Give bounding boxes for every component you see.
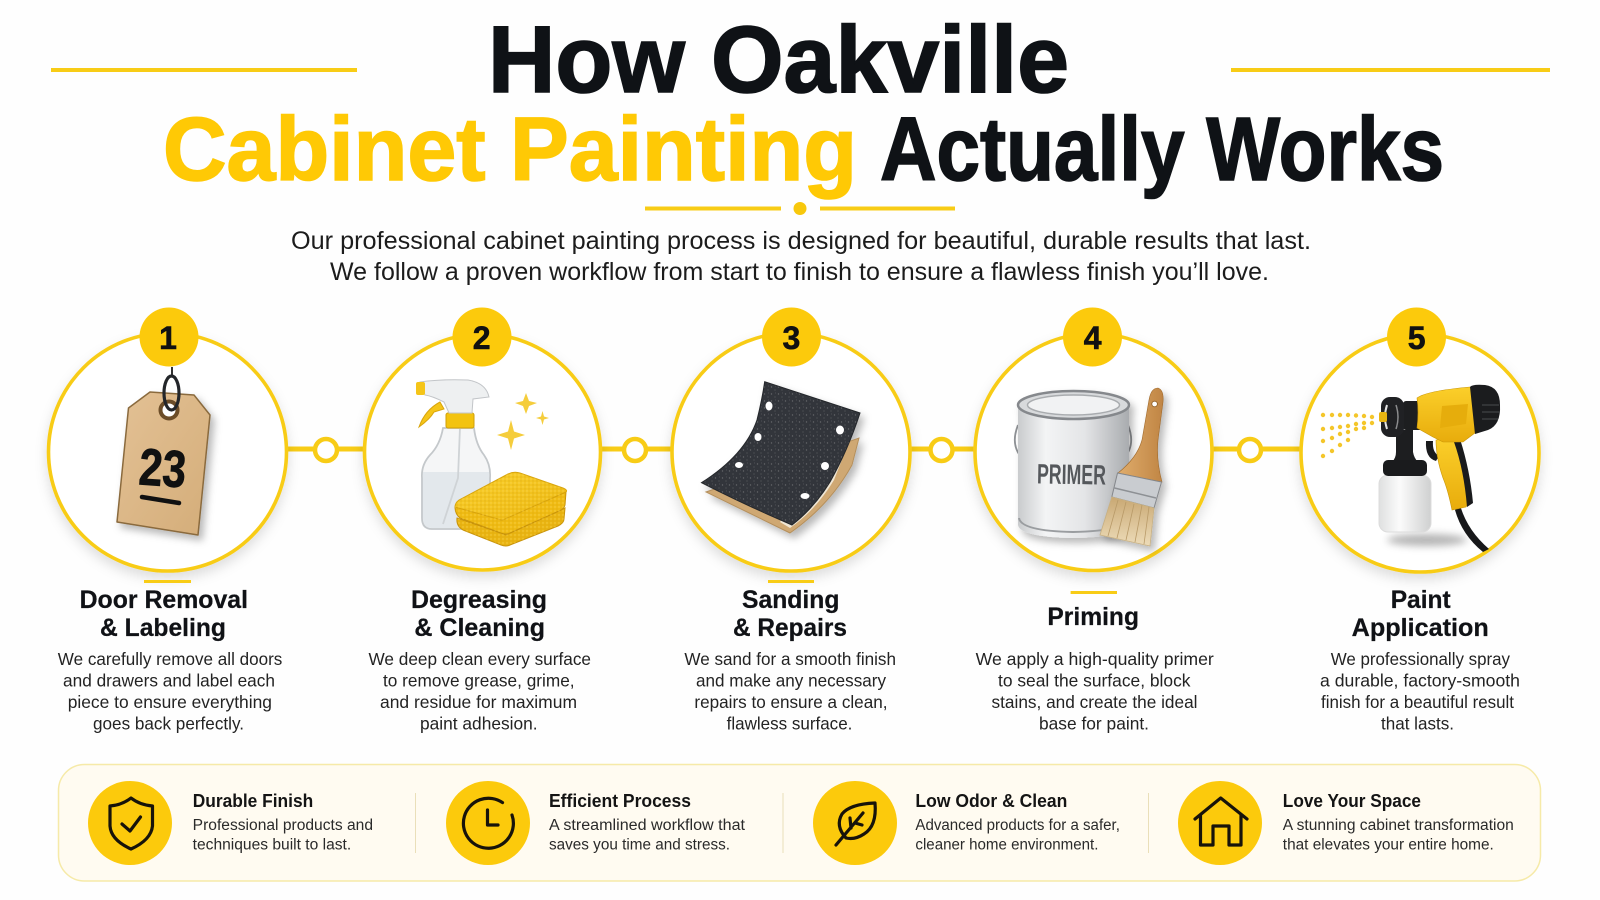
- step 2 description: [368, 649, 591, 734]
- step 1 description: [58, 649, 283, 734]
- step 1 description: goes back perfectly.: [93, 714, 244, 734]
- low odor text: Low Odor & Clean: [915, 791, 1067, 811]
- step 5 ring: [1301, 334, 1539, 572]
- icon: sandpaper sheets: [702, 382, 860, 533]
- benefit: efficient process: [446, 781, 746, 865]
- icon: leaf: [813, 781, 897, 865]
- step 3 number badge: [762, 308, 821, 366]
- step 5 number badge: [1387, 308, 1446, 366]
- step 4 description: [976, 649, 1214, 734]
- step 2 ring: [364, 334, 600, 570]
- step 2 number badge: 2: [473, 320, 490, 356]
- step 4: priming: [975, 308, 1214, 734]
- step 3 description: and make any necessary: [696, 670, 886, 690]
- step 5 heading: Application: [1352, 614, 1489, 642]
- step 2 description: paint adhesion.: [420, 714, 538, 734]
- step 1 number badge: [140, 308, 198, 366]
- step 5: paint application: [1301, 308, 1539, 734]
- title line 2 highlight: Cabinet Painting: [163, 100, 857, 200]
- low odor text: Advanced products for a safer,: [915, 817, 1120, 834]
- spray dots: [1321, 413, 1374, 458]
- step 5 description: [1320, 649, 1520, 734]
- step 3 description: [684, 649, 896, 734]
- step 2 heading: [411, 586, 547, 642]
- step 2: degreasing and cleaning: [364, 308, 600, 734]
- intro paragraph: Our professional cabinet painting process is designed for beautiful, durable results that last.: [291, 227, 1311, 255]
- icon: house: [1178, 781, 1262, 865]
- icon: numbered door tag: [117, 367, 210, 535]
- step 3 ring: [672, 333, 910, 571]
- step 4 description: We apply a high-quality primer: [976, 649, 1214, 669]
- step 2 description: and residue for maximum: [380, 692, 577, 712]
- step 5 heading: [1352, 586, 1489, 642]
- step 5 description: finish for a beautiful result: [1321, 692, 1514, 712]
- efficient process text: [549, 791, 746, 854]
- step 5 description: We professionally spray: [1331, 649, 1510, 669]
- love your space text: that elevates your entire home.: [1283, 836, 1494, 854]
- step 3 description: flawless surface.: [727, 714, 852, 734]
- step 1 heading: & Labeling: [100, 614, 226, 642]
- step 3 heading: Sanding: [742, 586, 839, 614]
- step 4 description: stains, and create the ideal: [992, 692, 1198, 712]
- love your space text: Love Your Space: [1283, 791, 1421, 811]
- step 1 ring: [48, 333, 286, 571]
- step 5 description: a durable, factory-smooth: [1320, 670, 1520, 690]
- durable finish text: Professional products and: [193, 817, 373, 834]
- title line 1: How Oakville: [488, 7, 1069, 113]
- panel background: [58, 764, 1540, 881]
- step 3 accent rule: [768, 580, 814, 583]
- step 3 description: repairs to ensure a clean,: [694, 692, 888, 712]
- icon: shield with check: [88, 781, 172, 865]
- step 1 accent rule: [144, 580, 191, 583]
- step 1: door removal and labeling: [48, 308, 286, 734]
- step 4 heading: Priming: [1047, 603, 1139, 631]
- step 2 description: We deep clean every surface: [368, 649, 591, 669]
- step 2 description: to remove grease, grime,: [383, 670, 575, 690]
- efficient process text: A streamlined workflow that: [549, 817, 746, 834]
- icon: primer can and brush: [1015, 388, 1163, 546]
- icon: primer can and brush: PRIMER: [1037, 458, 1106, 491]
- efficient process text: saves you time and stress.: [549, 836, 730, 854]
- title line 2 remainder: Actually Works: [880, 100, 1444, 200]
- benefit: love your space: [1178, 781, 1514, 865]
- step 1 description: We carefully remove all doors: [58, 649, 283, 669]
- low odor text: cleaner home environment.: [915, 836, 1098, 854]
- step 4 number badge: 4: [1084, 320, 1102, 356]
- durable finish text: Durable Finish: [193, 791, 313, 811]
- title ornament: [645, 202, 955, 215]
- step 4 description: to seal the surface, block: [998, 670, 1191, 690]
- icon: clock: [446, 781, 530, 865]
- love your space text: A stunning cabinet transformation: [1283, 817, 1514, 834]
- durable finish text: techniques built to last.: [193, 836, 351, 854]
- intro paragraph: [291, 227, 1311, 286]
- process connectors: [287, 439, 1301, 461]
- benefit: durable finish: [88, 781, 373, 865]
- step 4 number badge: [1063, 308, 1122, 366]
- step 5 heading: Paint: [1391, 586, 1451, 614]
- benefit: low odor and clean: [813, 781, 1120, 865]
- step 1 description: and drawers and label each: [63, 670, 275, 690]
- step 1 number badge: 1: [159, 320, 177, 356]
- step 3 heading: [733, 586, 847, 642]
- efficient process text: Efficient Process: [549, 791, 691, 811]
- left title rule: [51, 68, 357, 72]
- icon: numbered door tag: 23: [137, 438, 188, 500]
- panel: benefits strip: [58, 764, 1540, 881]
- step 5 description: that lasts.: [1381, 714, 1454, 734]
- step 4 ring: [975, 334, 1212, 570]
- step 1 description: piece to ensure everything: [68, 692, 272, 712]
- step 5 number badge: 5: [1408, 320, 1425, 356]
- step 1 heading: [80, 586, 248, 642]
- step 2 heading: Degreasing: [411, 586, 547, 614]
- step 4 accent rule: [1071, 591, 1117, 594]
- icon: spray bottle and towel: [416, 380, 567, 546]
- intro paragraph: We follow a proven workflow from start to finish to ensure a flawless finish you’ll love.: [330, 258, 1269, 286]
- step 2 heading: & Cleaning: [414, 614, 545, 642]
- step 3: sanding and repairs: [672, 308, 910, 734]
- step 3 heading: & Repairs: [733, 614, 847, 642]
- icon: paint spray gun: [1321, 385, 1500, 552]
- header: title and intro: [51, 7, 1550, 286]
- step 3 description: We sand for a smooth finish: [684, 649, 896, 669]
- low odor text: [915, 791, 1120, 854]
- step 3 number badge: 3: [783, 320, 800, 356]
- right title rule: [1231, 68, 1550, 72]
- step 4 description: base for paint.: [1039, 714, 1149, 734]
- step 1 heading: Door Removal: [80, 586, 248, 614]
- durable finish text: [193, 791, 373, 854]
- love your space text: [1283, 791, 1514, 854]
- step 2 number badge: [452, 308, 512, 366]
